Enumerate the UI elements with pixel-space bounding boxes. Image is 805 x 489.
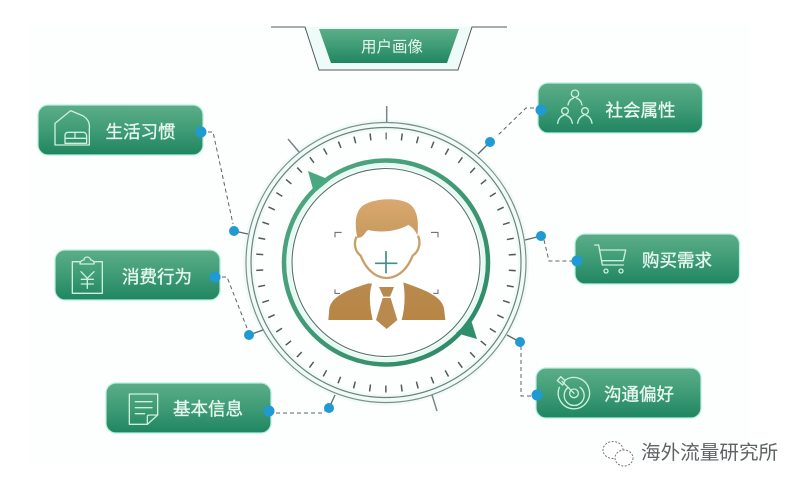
person icon [328,199,445,329]
icon: clipboard with yen [72,257,102,293]
card: 购买需求 [572,234,740,284]
card: 沟通偏好 [532,368,701,418]
face outline [355,236,419,278]
card: 基本信息 [106,383,274,433]
short tick marks [260,136,512,389]
title banner [271,27,507,70]
card: 生活习惯: 生活习惯 [106,122,176,142]
scan brackets [335,232,438,293]
card: 基本信息: 基本信息 [173,399,243,419]
icon: people group [558,90,592,123]
icon: target with arrow [557,377,590,409]
card: 生活习惯 [38,105,206,155]
card: 购买需求: 购买需求 [642,250,712,270]
card: 消费行为: 消费行为 [122,267,192,287]
icon: document [129,394,158,424]
hair [356,199,418,238]
central dial [246,106,526,411]
card: 社会属性: 社会属性 [606,100,676,120]
icon: chat bubbles [603,442,633,466]
card: 沟通偏好: 沟通偏好 [604,384,674,404]
crosshair [375,251,397,273]
watermark: 海外流量研究所 [641,442,778,464]
card: 消费行为 [55,250,220,300]
connectors [201,108,577,413]
title banner: 用户画像 [361,38,423,56]
long ticks [288,106,437,411]
ring pointers [308,171,330,193]
card: 社会属性 [536,83,702,133]
tie [376,287,397,329]
green ring [284,160,488,364]
suit [328,282,445,320]
icon: shopping cart [595,245,626,273]
icon: house with sofa [55,111,89,145]
